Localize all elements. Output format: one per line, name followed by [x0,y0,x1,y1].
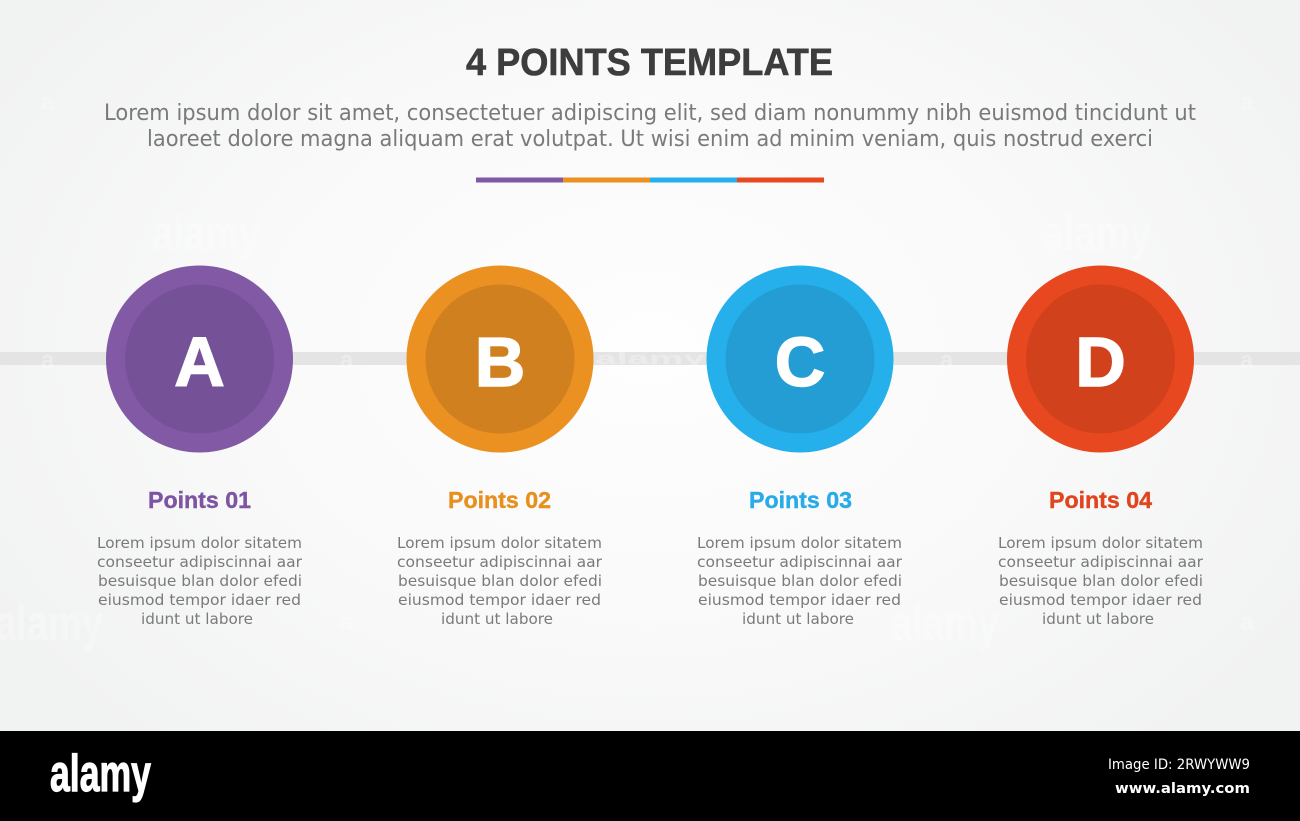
text block: points 04: Lorem ipsum dolor sitatem [998,534,1203,552]
watermarks: a [340,347,354,374]
watermarks [0,89,1254,651]
watermarks: a [1240,609,1254,636]
text block: points 02: besuisque blan dolor efedi [398,572,602,590]
icon: circle B: B [475,323,525,401]
text block: points 03: Lorem ipsum dolor sitatem [697,534,902,552]
subtitle text: laoreet dolore magna aliquam erat volutpat. Ut wisi enim ad minim veniam, quis nostrud exerci [147,127,1153,152]
watermarks: alamy [595,349,706,368]
watermarks: a [641,89,655,116]
text block: points 03: eiusmod tempor idaer red [698,591,901,609]
icon: circle C: C [775,323,825,401]
heading: points 04: Points 04 [1049,487,1152,513]
watermarks: alamy [152,205,260,261]
heading: points 02: Points 02 [448,487,551,513]
watermarks: alamy [891,595,999,651]
footer logo: alamy [50,745,151,803]
text block: points 04: besuisque blan dolor efedi [999,572,1203,590]
footer image id: Image ID: 2RWYWW9 [1108,757,1250,773]
icon: circle A: A [174,323,225,401]
text block: points 02: conseetur adipiscinnai aar [397,553,603,571]
text block: points 03: besuisque blan dolor efedi [698,572,902,590]
panel: point D [998,266,1204,628]
footer bar [0,731,1300,821]
watermarks: a [340,609,354,636]
text block: points 02 [397,534,603,628]
icon: circle C [706,266,894,452]
icon: circle D [1007,266,1194,452]
text block: points 03 [697,534,903,628]
text block: points 02: Lorem ipsum dolor sitatem [397,534,602,552]
watermarks: a [1240,89,1254,116]
subtitle text: Lorem ipsum dolor sit amet, consectetuer adipiscing elit, sed diam nonummy nibh euismod tincidunt ut [104,101,1196,126]
watermarks: a [641,609,655,636]
watermarks: a [940,347,954,374]
text block: points 01: Lorem ipsum dolor sitatem [97,534,302,552]
panel: point C [697,266,903,628]
watermarks: a [940,89,954,116]
icon: circle D: D [1075,323,1126,401]
four-colour divider [476,178,824,182]
text block: points 04: eiusmod tempor idaer red [999,591,1202,609]
text block: points 01: conseetur adipiscinnai aar [97,553,303,571]
text block: points 03: conseetur adipiscinnai aar [697,553,903,571]
icon: circle B [406,266,594,452]
text block: points 02: idunt ut labore [441,610,553,628]
text block: points 01: besuisque blan dolor efedi [98,572,302,590]
title: 4 POINTS TEMPLATE [466,42,833,84]
icon: circle A [106,266,293,452]
watermarks: alamy [1043,205,1151,261]
text block: points 04: conseetur adipiscinnai aar [998,553,1204,571]
text block: points 03: idunt ut labore [742,610,854,628]
text block: points 04 [998,534,1204,628]
panel: point A [97,266,303,628]
heading: points 03: Points 03 [749,487,852,513]
horizontal connector line [0,352,1300,365]
text block: points 01: idunt ut labore [141,610,253,628]
watermarks: a [340,89,354,116]
text block: points 04: idunt ut labore [1042,610,1154,628]
text block: points 01 [97,534,303,628]
footer url: www.alamy.com [1115,781,1250,797]
panel: point B [397,266,603,628]
subtitle text [104,101,1196,152]
watermarks: a [41,347,55,374]
heading: points 01: Points 01 [148,487,251,513]
watermarks: a [41,89,55,116]
text block: points 01: eiusmod tempor idaer red [98,591,301,609]
watermarks: a [1240,347,1254,374]
text block: points 02: eiusmod tempor idaer red [398,591,601,609]
